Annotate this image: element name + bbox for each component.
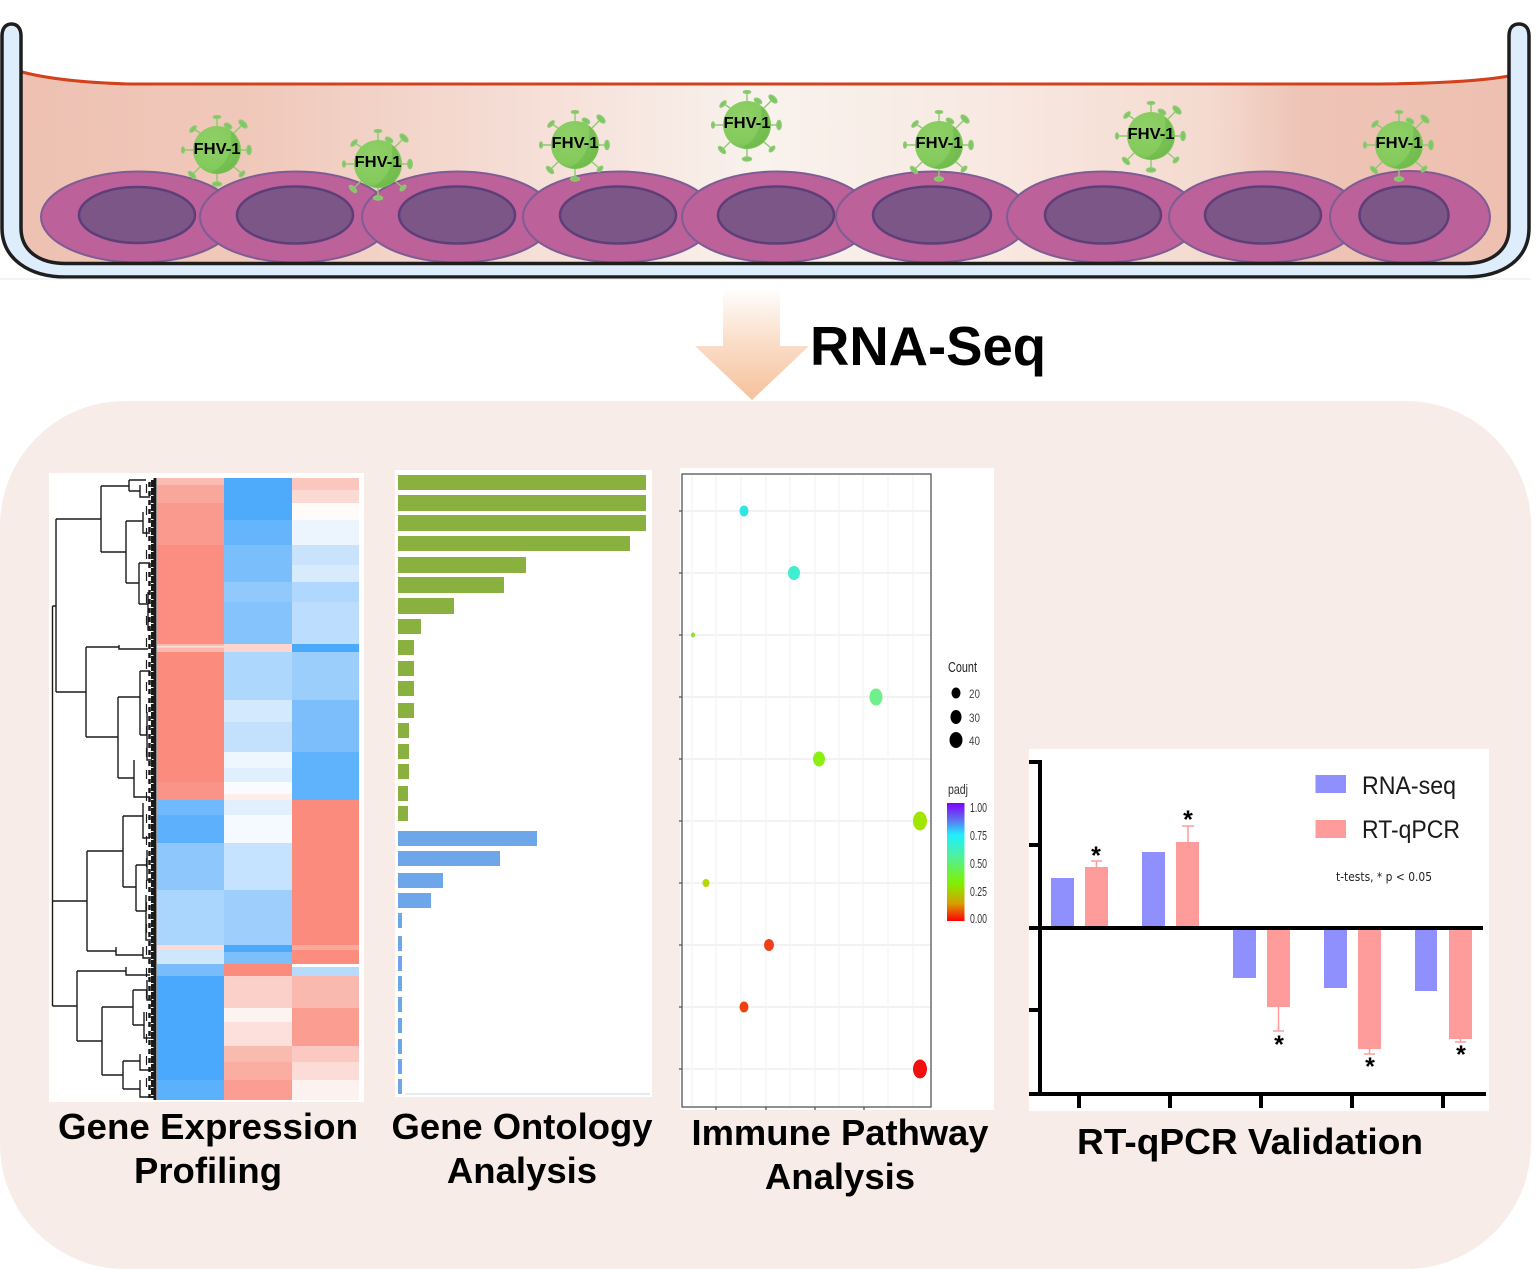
green bars [398, 475, 646, 821]
significance stars: * [1456, 1041, 1466, 1069]
virus 7 [1364, 111, 1433, 181]
heading: RNA-Seq: RNA-Seq [810, 315, 1046, 377]
legend: RT-qPCR [1362, 816, 1460, 844]
label: gene ontology analysis: Gene Ontology [392, 1106, 653, 1147]
legend: count: 30 [969, 711, 980, 725]
legend [1316, 772, 1460, 844]
chart: gene ontology bars [395, 470, 652, 1097]
chart: gene expression heatmap [49, 473, 364, 1102]
heatmap column 2 [224, 478, 292, 1100]
legend: padj colour bar: 0.75 [970, 829, 987, 843]
test note: t-tests, * p < 0.05 [1336, 870, 1432, 884]
label: RT-qPCR validation: RT-qPCR Validation [1077, 1121, 1423, 1162]
legend: RNA-seq [1362, 772, 1456, 800]
virus 6 [1116, 102, 1185, 172]
legend: padj colour bar: 0.50 [970, 857, 987, 871]
label: immune pathway analysis: Immune Pathway [692, 1112, 989, 1153]
heatmap column 1 [157, 478, 224, 1100]
significance stars: * [1183, 806, 1193, 834]
label: gene ontology analysis [392, 1106, 653, 1191]
error bars [1091, 826, 1466, 1054]
virus 5 [904, 111, 973, 181]
virus 2 [343, 130, 412, 200]
virus 1: FHV-1 [194, 141, 241, 158]
legend: padj colour bar: 0.25 [970, 885, 987, 899]
legend: count: 20 [969, 687, 980, 701]
arrow: RNA-Seq step [695, 290, 809, 400]
virus 3: FHV-1 [552, 135, 599, 152]
dish wall [2, 24, 1529, 277]
bubbles [691, 506, 927, 1078]
virus 7: FHV-1 [1376, 135, 1423, 152]
label: immune pathway analysis: Analysis [765, 1156, 915, 1197]
virus 5: FHV-1 [916, 135, 963, 152]
label: gene ontology analysis: Analysis [447, 1150, 597, 1191]
legend: padj colour bar: 1.00 [970, 801, 987, 815]
RT-qPCR bars [1085, 842, 1472, 1049]
chart: immune pathway bubble plot [679, 468, 994, 1110]
virus 4 [712, 91, 781, 161]
heatmap column 3 [292, 478, 359, 1100]
panel: results background [0, 401, 1531, 1269]
significance stars: * [1274, 1031, 1284, 1059]
RNA-seq bars [1051, 852, 1437, 991]
label: gene expression profiling: Profiling [134, 1150, 282, 1191]
significance stars: * [1365, 1053, 1375, 1081]
legend: count: Count [948, 660, 977, 676]
label: gene expression profiling [58, 1106, 358, 1191]
virus 1 [182, 116, 251, 186]
axes [1029, 760, 1486, 1108]
virus 4: FHV-1 [724, 115, 771, 132]
significance stars: * [1091, 842, 1101, 870]
blue bars [398, 831, 537, 1094]
legend: count: 40 [969, 734, 980, 748]
chart: RT-qPCR validation bars [1029, 749, 1489, 1111]
virus 2: FHV-1 [354, 154, 402, 171]
virus 3 [540, 111, 609, 181]
legend: padj colour bar [947, 781, 987, 926]
cell monolayer [41, 171, 1490, 263]
medium surface line [22, 72, 1509, 84]
legend: count [948, 660, 980, 748]
virus 6: FHV-1 [1128, 126, 1175, 143]
label: gene expression profiling: Gene Expression [58, 1106, 358, 1147]
label: immune pathway analysis [692, 1112, 989, 1197]
legend: padj colour bar: padj [948, 781, 968, 797]
significance stars [1091, 806, 1466, 1081]
legend: padj colour bar: 0.00 [970, 912, 987, 926]
dendrogram [52, 478, 155, 1100]
culture medium [22, 72, 1509, 264]
panel: culture dish [2, 24, 1529, 277]
